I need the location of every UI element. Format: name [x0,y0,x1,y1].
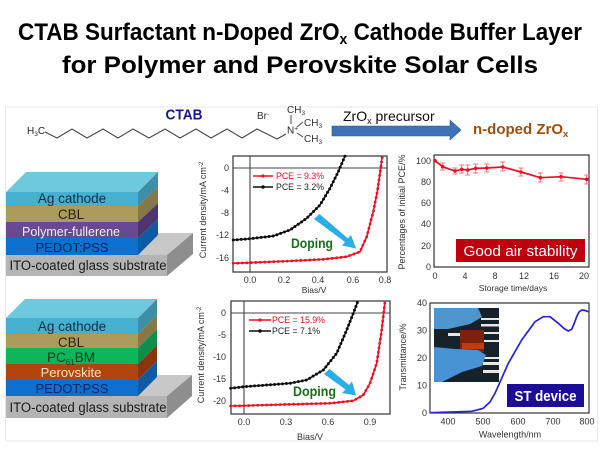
J-V chart: polymer cell: 0.2 [278,275,290,285]
J-V chart: polymer cell: -16 [216,253,229,263]
device stack: perovskite cell [6,299,192,418]
transmittance chart [398,298,595,440]
J-V chart: polymer cell: 0 [224,163,229,173]
stability chart: 12 [519,271,529,281]
callout: ST device [507,384,584,407]
stability chart: 40 [421,219,431,229]
title: Cathode Buffer Layer [347,19,582,46]
title: CTAB Surfactant n-Doped ZrO [18,19,362,46]
J-V chart: perovskite cell: -20 [213,396,226,406]
callout: ST device: ST device [514,388,576,405]
J-V chart: polymer cell: -2 [199,161,205,167]
reaction arrow: x [367,116,372,126]
CTAB molecule formula: 3 [318,123,322,130]
product label: x [563,129,569,140]
J-V chart: polymer cell: -8 [221,208,229,218]
title: x [340,31,348,48]
layer labels: CBL [58,335,85,350]
legend [253,171,325,193]
CTAB molecule formula: H [27,126,34,137]
layer labels: BM [75,350,95,365]
CTAB molecule formula: 3 [318,139,322,146]
J-V chart: perovskite cell: -2 [197,306,203,312]
transmittance chart: 40 [417,298,427,308]
CTAB molecule formula: CH [287,105,301,116]
doping label: Doping [293,383,336,399]
transmittance chart: 20 [417,353,427,363]
CTAB molecule formula: CH [304,118,318,129]
J-V chart: perovskite cell: 0.0 [238,417,250,427]
layer labels: Perovskite [41,365,101,380]
layer labels: 61 [66,358,75,367]
stability chart [397,154,589,293]
stability chart: 60 [421,198,431,208]
J-V chart: polymer cell: -4 [221,186,229,196]
J-V chart: polymer cell [198,156,391,295]
stability chart: 0 [432,271,438,281]
stability chart: 8 [492,271,498,281]
stability chart: Percentages of initial PCE/% [397,154,407,270]
CTAB molecule formula: 3 [301,110,305,117]
J-V chart: polymer cell: -12 [216,230,229,240]
arrow: doping [324,369,356,396]
legend [249,315,326,337]
layer labels: ITO-coated glass substrate [10,400,166,415]
CTAB molecule formula: CH [304,134,318,145]
CTAB molecule formula: N [287,126,294,136]
product label: n-doped ZrO [473,121,563,138]
panel: figure [6,105,598,442]
J-V chart: perovskite cell: Bias/V [297,432,323,442]
layer labels: CBL [58,207,85,222]
layer labels: Ag cathode [38,319,106,334]
transmittance chart: 600 [510,416,526,426]
legend: PCE = 3.2% [276,182,325,193]
legend: PCE = 9.3% [276,171,325,182]
title [18,19,582,79]
J-V chart: perovskite cell: 0.6 [322,417,334,427]
arrow: doping [314,214,356,248]
J-V chart: perovskite cell: 0.3 [280,417,292,427]
layer labels: PC [47,350,66,365]
transmittance chart: 500 [475,416,491,426]
device stack: polymer cell [6,172,193,276]
reaction arrow [332,108,461,140]
reaction arrow: ZrO [343,108,367,124]
J-V chart: perovskite cell: -15 [213,374,226,384]
transmittance chart: 800 [579,416,595,426]
stability chart: Storage time/days [479,283,547,293]
transmittance chart: 10 [417,380,427,390]
layer labels [10,191,166,273]
layer labels: PEDOT:PSS [36,240,109,255]
J-V chart: polymer cell: 0.6 [347,275,359,285]
CTAB molecule formula: CTAB [166,106,203,124]
layer labels: Polymer-fullerene [22,225,120,239]
transmittance chart: 30 [417,326,427,336]
CTAB molecule formula [27,105,322,146]
stability chart: 16 [549,271,559,281]
doping label: Doping [291,235,333,251]
layer labels: PEDOT:PSS [36,381,109,396]
J-V chart: polymer cell: 0.0 [244,275,256,285]
CTAB molecule formula: Br [257,111,267,122]
stability chart: 20 [421,241,431,251]
J-V chart: perovskite cell: 0.9 [364,417,376,427]
stability chart: 0 [426,262,431,272]
photo of device [434,308,499,382]
CTAB molecule formula: C [38,126,45,137]
J-V chart: perovskite cell: Current density/mA cm [196,312,206,403]
layer labels [10,319,166,415]
transmittance chart: 700 [545,416,561,426]
legend: PCE = 15.9% [272,315,326,326]
layer labels: Ag cathode [38,191,106,206]
callout: good air stability [456,239,585,262]
error bars [440,162,589,184]
callout: good air stability: Good air stability [464,244,578,260]
J-V chart: polymer cell: Bias/V [302,285,327,295]
J-V chart: polymer cell: Current density/mA cm [198,167,208,258]
reaction arrow: precursor [372,108,435,124]
stability chart: 4 [462,271,468,281]
J-V chart: perovskite cell: -5 [218,330,226,340]
legend: PCE = 7.1% [272,326,321,337]
transmittance chart: 0 [422,408,427,418]
J-V chart: perovskite cell: -10 [213,352,226,362]
CTAB molecule formula: + [294,126,298,132]
stability chart: 100 [416,156,431,166]
stability chart: 80 [421,177,431,187]
J-V chart: perovskite cell [196,301,390,442]
CTAB molecule formula: - [267,111,269,118]
stability chart: 20 [579,271,589,281]
transmittance chart: Transmittance/% [398,323,408,391]
J-V chart: perovskite cell: 0 [221,308,226,318]
CTAB molecule formula: 3 [34,131,38,138]
transmittance chart: Wavelength/nm [479,430,541,440]
layer labels: ITO-coated glass substrate [10,258,166,273]
J-V chart: polymer cell: 0.4 [312,275,324,285]
J-V chart: polymer cell: 0.8 [379,275,391,285]
transmittance chart: 400 [440,416,456,426]
title: for Polymer and Perovskite Solar Cells [62,52,538,79]
